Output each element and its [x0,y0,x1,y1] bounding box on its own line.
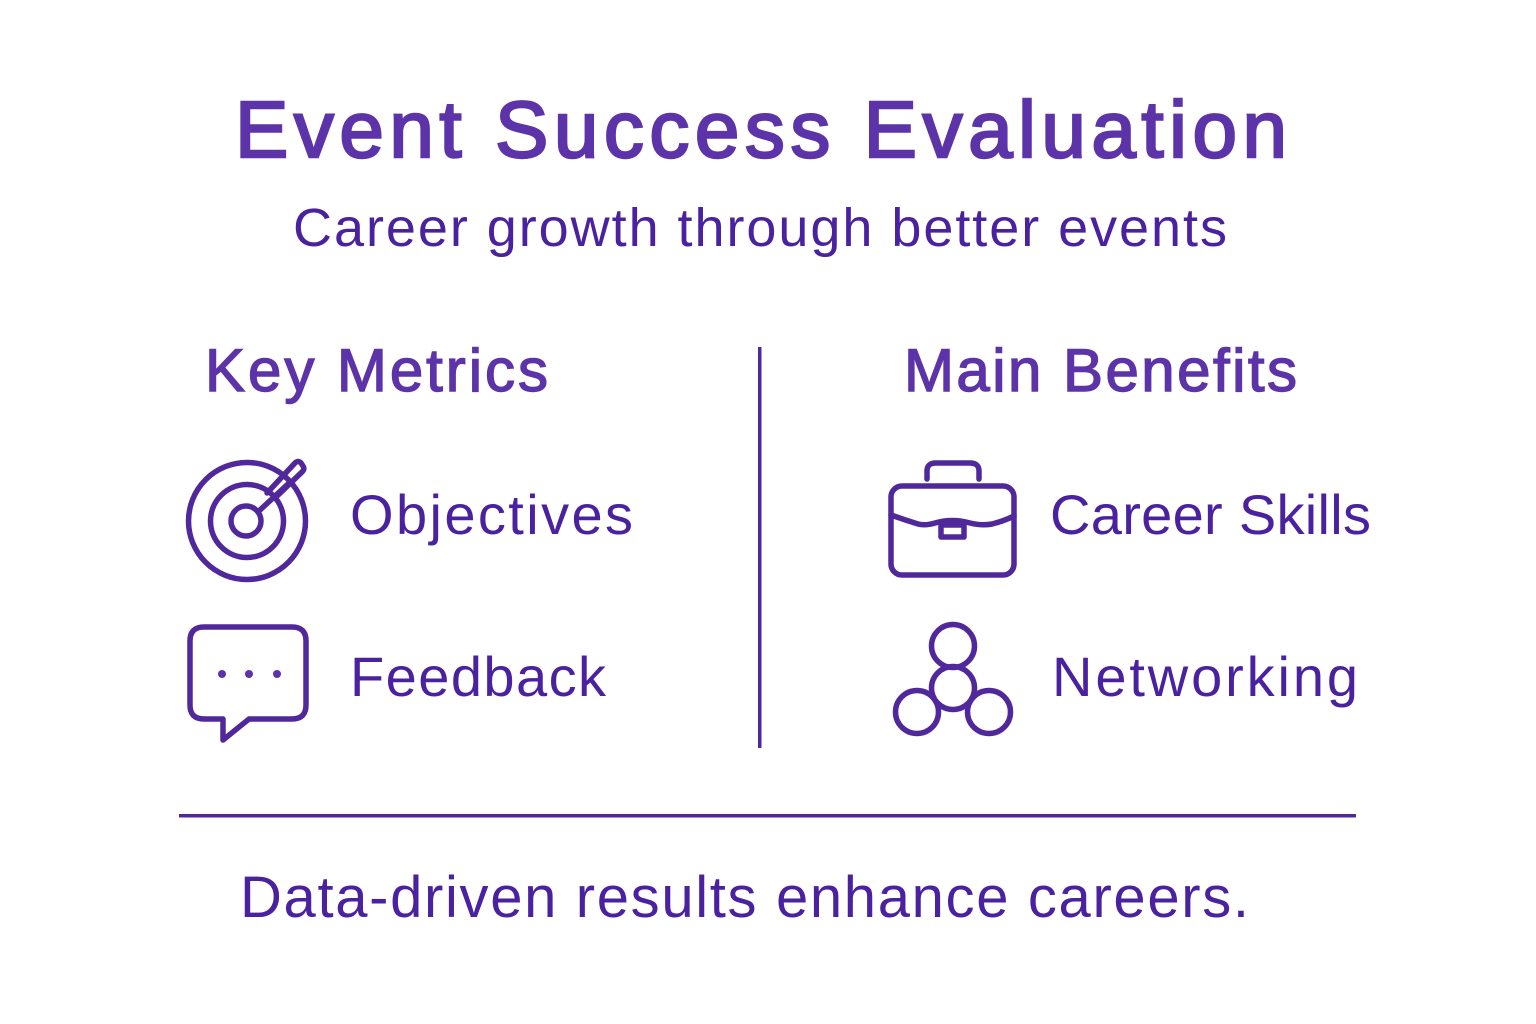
label: networking: Networking [1052,645,1358,708]
title: Event Success Evaluation [235,85,1287,174]
subtitle: Career growth through better events [293,198,1227,258]
panel: key metrics [188,337,633,740]
icon: target [188,462,306,580]
heading: key metrics: Key Metrics [205,337,548,404]
label: career skills: Career Skills [1050,483,1371,546]
vertical divider [758,347,762,748]
panel: main benefits [891,337,1371,734]
icon: speech bubble [190,627,306,740]
icon: briefcase [891,463,1014,575]
footer statement: Data-driven results enhance careers. [240,865,1249,930]
label: objectives: Objectives [350,483,633,546]
heading: main benefits: Main Benefits [904,337,1297,404]
icon: network circles [896,624,1010,734]
label: feedback: Feedback [350,645,607,708]
horizontal divider [179,814,1356,818]
